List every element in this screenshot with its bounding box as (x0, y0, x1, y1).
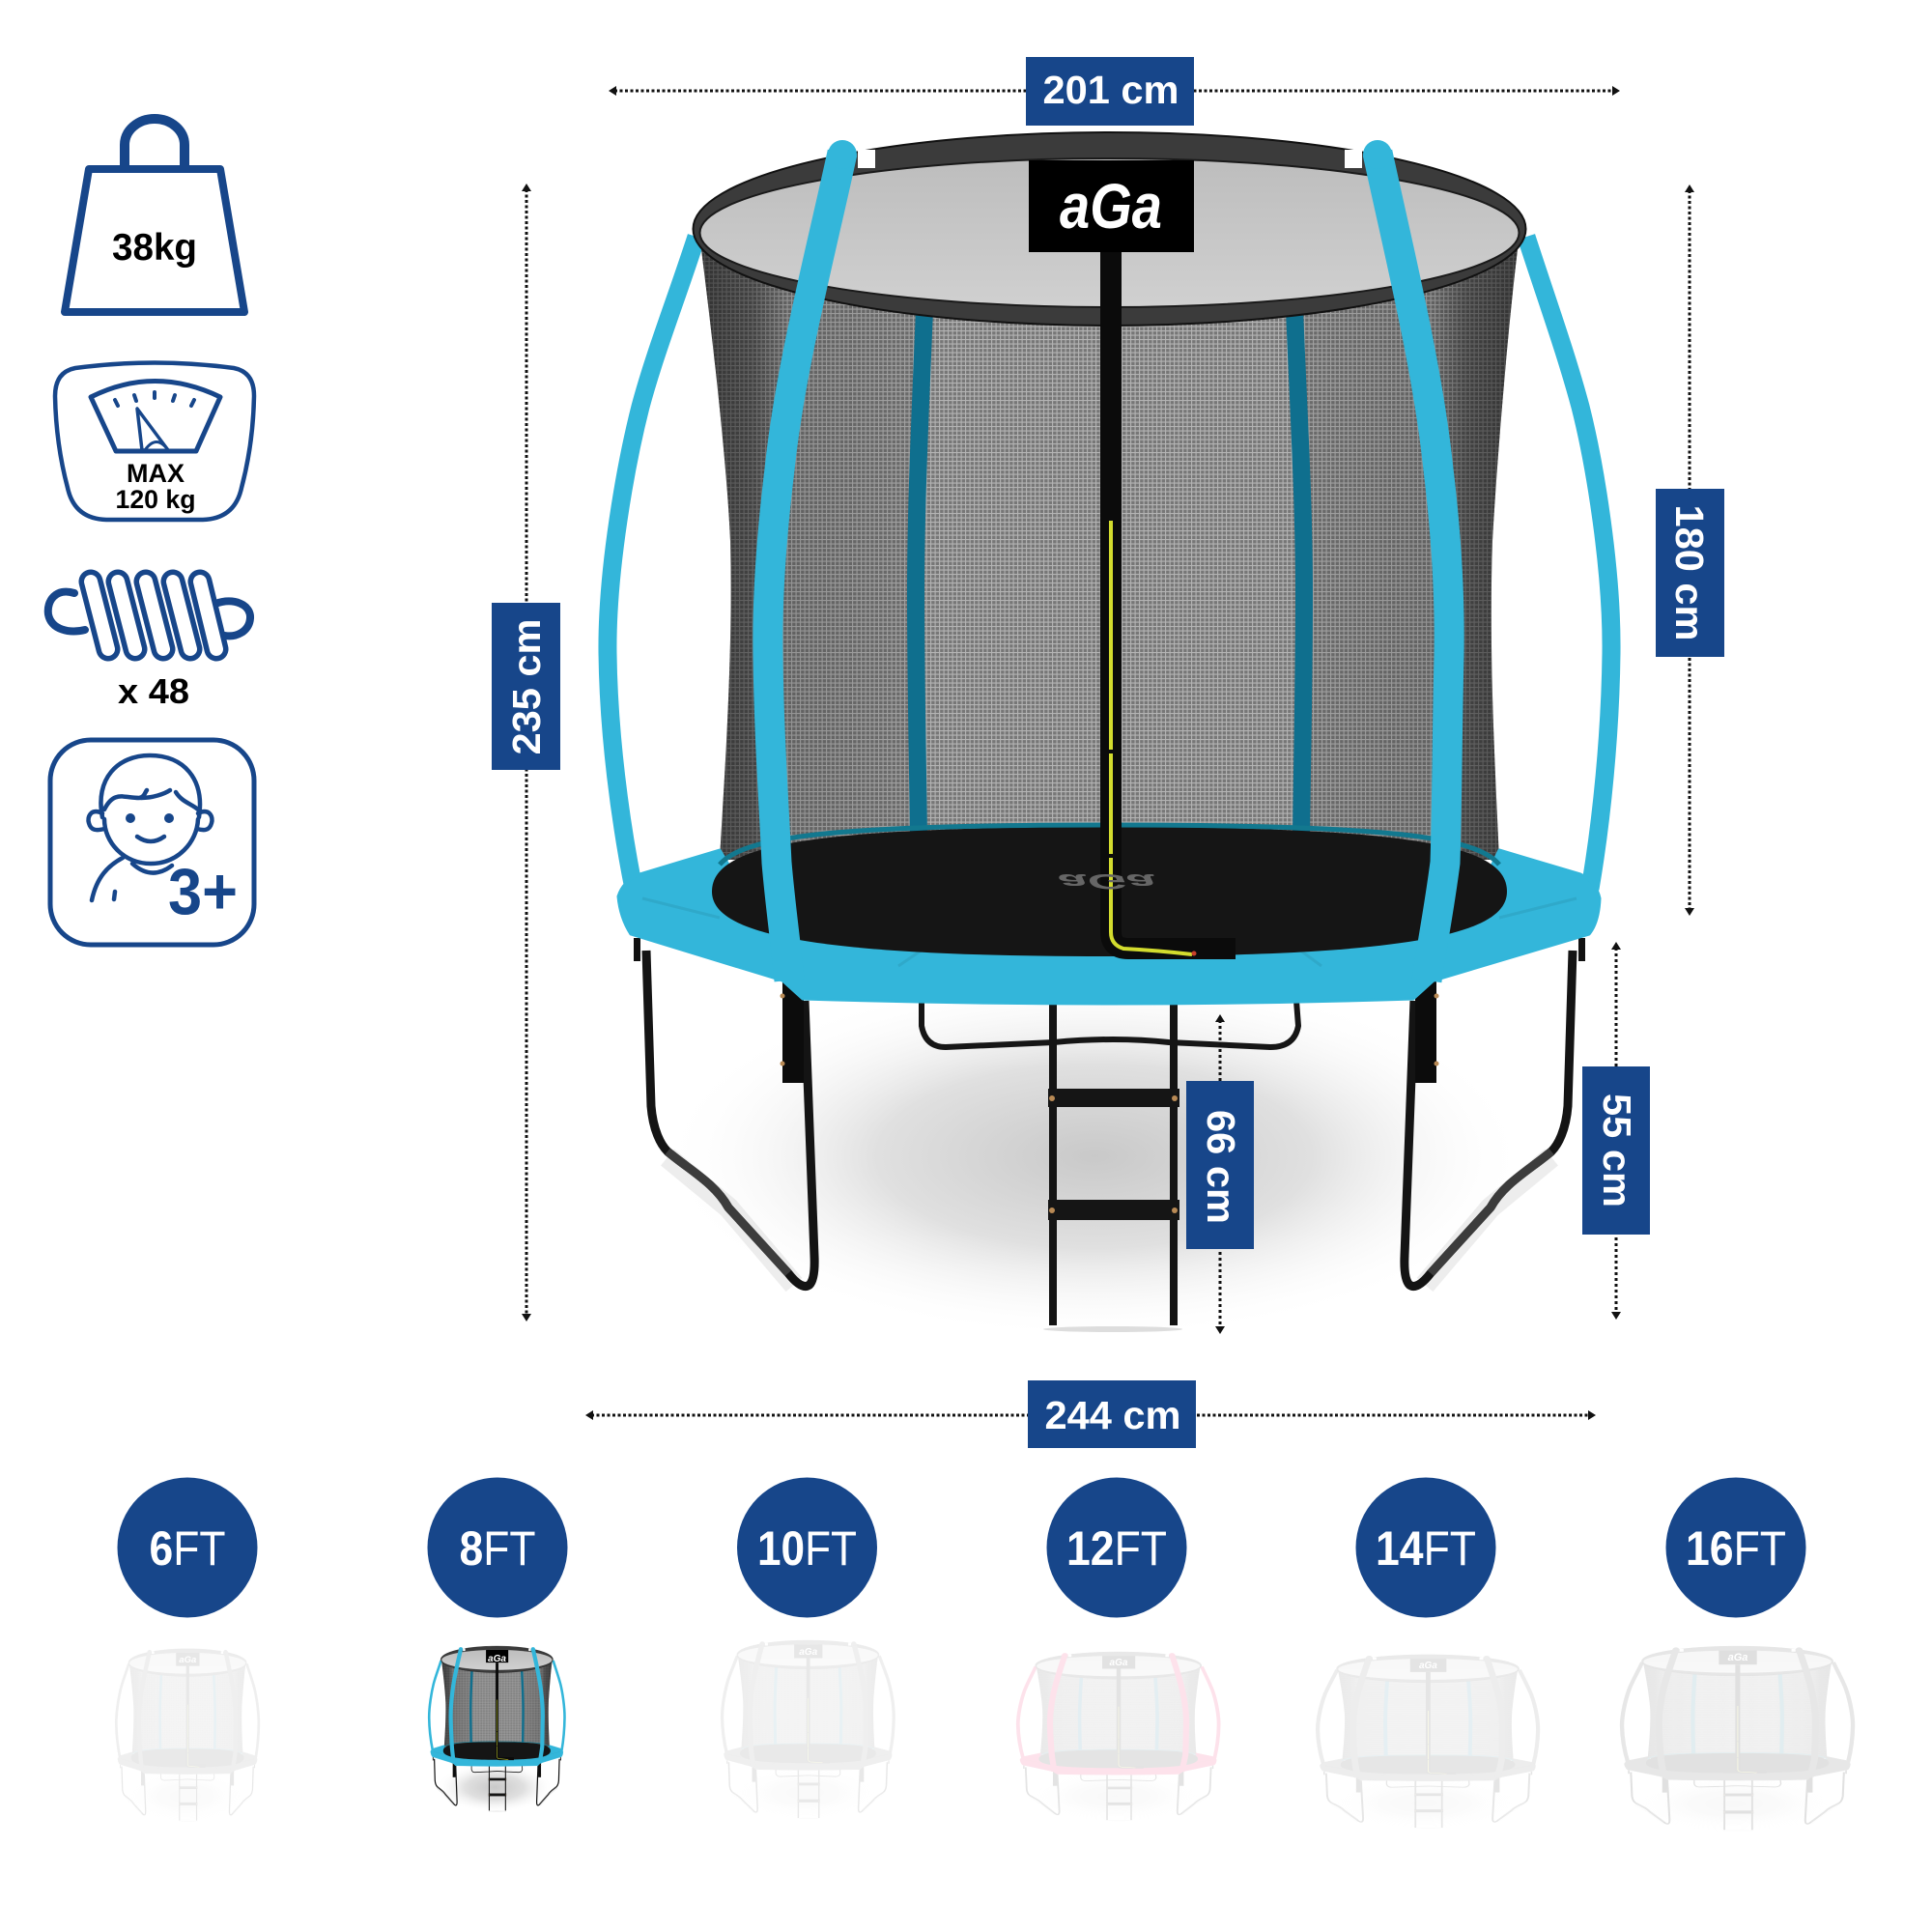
dimension: leg height 55 cm: 55 cm (1595, 1094, 1639, 1208)
dimension: frame diameter 244 cm: 244 cm (1045, 1393, 1180, 1437)
safety net (700, 242, 1519, 860)
dimension: leg height 55 cm (1582, 942, 1650, 1320)
dimension: ground clearance 66 cm: 66 cm (1199, 1110, 1243, 1224)
floor shadow (660, 973, 1529, 1340)
logo plate (1029, 160, 1194, 252)
size badge: 16FT: 16FT (1686, 1521, 1786, 1576)
thumbnail: 12FT trampoline, faded pink (1018, 1652, 1219, 1822)
icon: max load 120 kg scale: 120 kg (116, 485, 195, 514)
thumbnail: 14FT trampoline, faded (1318, 1655, 1538, 1830)
thumbnail: 10FT trampoline, faded: aGa (799, 1647, 818, 1658)
dimension: frame diameter 244 cm (585, 1380, 1596, 1448)
logo on mat: aGa (1059, 869, 1155, 893)
rear poles (916, 309, 1304, 837)
inner right pole (1363, 140, 1449, 980)
outer left pole (608, 237, 696, 889)
thumbnail: 10FT trampoline, faded (723, 1640, 894, 1820)
size badge: 14FT: 14FT (1376, 1521, 1476, 1576)
size badge: 10FT (737, 1478, 877, 1617)
size badge: 6FT (118, 1478, 257, 1617)
thumbnail: 6FT trampoline, faded: aGa (179, 1655, 196, 1665)
icon: child age 3+: 3+ (168, 855, 238, 928)
dimension: total height 235 cm: 235 cm (504, 618, 549, 755)
icon: 48 springs: x 48 (118, 671, 189, 711)
dimension: total height 235 cm (492, 184, 560, 1321)
right leg (1405, 938, 1585, 1287)
size badge: 12FT (1047, 1478, 1186, 1617)
thumbnail: 12FT trampoline, faded pink: aGa (1110, 1658, 1128, 1668)
icon: max load 120 kg scale: MAX (127, 459, 185, 488)
size badge: 14FT (1356, 1478, 1495, 1617)
jumping mat (712, 827, 1507, 956)
thumbnail: 8FT trampoline, highlighted: aGa (488, 1654, 506, 1664)
size badge: 6FT: 6FT (149, 1521, 226, 1576)
rear U-frame leg (922, 1001, 1298, 1047)
left leg (634, 938, 814, 1287)
logo on net: aGa (1060, 170, 1162, 242)
net door strip (1111, 252, 1236, 956)
padded frame cover (618, 850, 1600, 1004)
mat rear rim (720, 825, 1499, 865)
dimension: top net diameter 201 cm: 201 cm (1043, 68, 1179, 112)
dimension: top net diameter 201 cm (609, 57, 1620, 126)
icon: child age 3+ (50, 740, 254, 945)
main trampoline illustration (608, 132, 1611, 1340)
dimension: net height 180 cm (1656, 185, 1724, 916)
thumbnail: 8FT trampoline, highlighted (429, 1646, 564, 1813)
dimension: ground clearance 66 cm (1186, 1014, 1254, 1334)
icon: max load 120 kg scale (55, 363, 254, 520)
inner left pole (768, 140, 857, 980)
size badge: 8FT (427, 1478, 568, 1617)
dimension: net height 180 cm: 180 cm (1667, 504, 1712, 641)
size badge: 8FT: 8FT (460, 1521, 535, 1576)
top net ring (694, 132, 1526, 326)
thumbnail: 16FT trampoline, faded (1622, 1646, 1853, 1833)
icon: 38kg trampoline weight: 38kg (112, 227, 197, 269)
size badge: 10FT: 10FT (757, 1521, 857, 1576)
icon: 38kg trampoline weight (65, 119, 244, 312)
outer right pole (1526, 237, 1611, 889)
thumbnail: 6FT trampoline, faded (116, 1649, 259, 1823)
thumbnail: 16FT trampoline, faded: aGa (1728, 1652, 1747, 1663)
thumbnail: 14FT trampoline, faded: aGa (1419, 1661, 1437, 1671)
ladder (1043, 1004, 1182, 1332)
icon: 48 springs (48, 582, 250, 711)
size badge: 16FT (1665, 1478, 1806, 1617)
size badge: 12FT: 12FT (1066, 1521, 1167, 1576)
